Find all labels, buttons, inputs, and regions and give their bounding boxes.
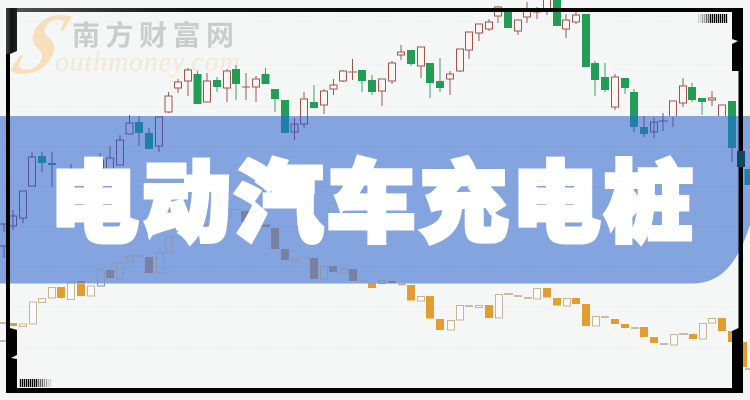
watermark: southmoney logo: outhmoney.com bbox=[55, 47, 240, 78]
candlesticks above the band bbox=[165, 0, 736, 128]
watermark: southmoney logo bbox=[0, 0, 240, 92]
blue title band bbox=[0, 116, 750, 284]
barcode mark: top right bbox=[698, 14, 726, 23]
barcode mark: bottom left bbox=[20, 379, 50, 387]
candlesticks inside the band, upper row bbox=[0, 113, 750, 258]
candlesticks inside the band, lower row bbox=[68, 209, 396, 286]
watermark: southmoney logo: 南方财富网 bbox=[72, 19, 240, 51]
candlesticks below the band bbox=[0, 284, 750, 369]
dark candle over the frame bbox=[737, 151, 745, 167]
title: 电动汽车充电桩 bbox=[50, 154, 697, 253]
